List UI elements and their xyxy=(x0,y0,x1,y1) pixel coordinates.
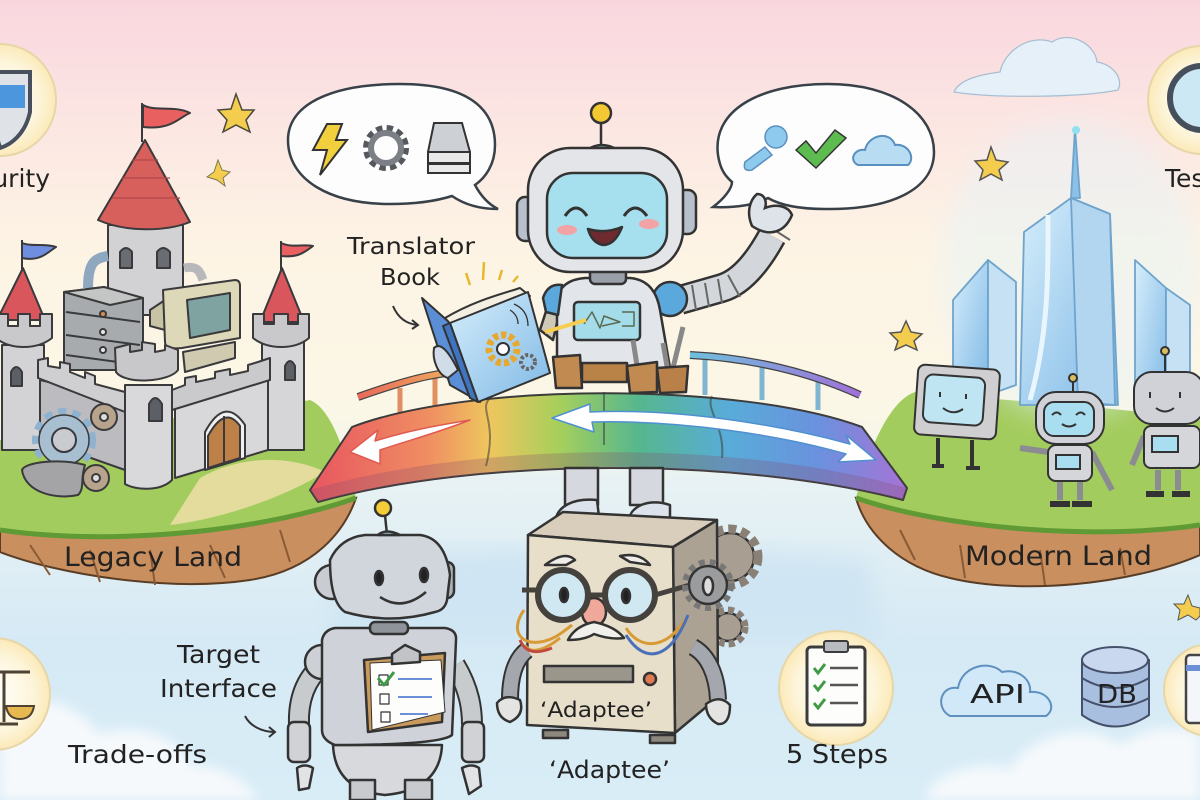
shoulders xyxy=(305,645,339,679)
label: target interface: Target xyxy=(176,640,260,669)
icon: trade-offs scales badge xyxy=(0,638,50,750)
icon: gear xyxy=(367,129,405,167)
arrow: book pointer xyxy=(393,306,418,329)
machine feet xyxy=(543,730,675,743)
label: five steps: 5 Steps xyxy=(786,740,888,770)
character: center robot xyxy=(517,103,790,527)
icon: happy monitor character xyxy=(914,364,1000,468)
panel: modern land island xyxy=(856,392,1200,586)
neck xyxy=(590,268,626,284)
old computer xyxy=(150,280,240,372)
icon: star top left xyxy=(218,94,254,132)
legs xyxy=(565,468,663,505)
icon: document badge xyxy=(1164,644,1200,736)
right pipe xyxy=(184,267,203,280)
icon: glow rays xyxy=(466,262,518,285)
icon: test pill xyxy=(744,126,787,170)
ears xyxy=(315,565,349,599)
icon: small modern robot right xyxy=(1132,347,1200,494)
bridge railings xyxy=(358,355,860,422)
label: modern land: Modern Land xyxy=(965,541,1152,572)
label: target interface xyxy=(160,640,277,703)
label: adaptee on machine: ‘Adaptee’ xyxy=(540,698,652,722)
top face xyxy=(528,512,717,547)
icon: small modern robot center xyxy=(1020,374,1112,504)
mustache xyxy=(568,622,624,640)
ears xyxy=(517,197,535,241)
icon: star right upper xyxy=(975,147,1008,180)
blue pipe xyxy=(88,256,108,288)
front tower xyxy=(125,385,172,489)
side gear xyxy=(689,566,727,604)
water shimmer xyxy=(330,549,880,640)
arms xyxy=(510,650,527,700)
label: api: API xyxy=(970,680,1025,710)
raised robot hand xyxy=(749,194,792,232)
panel: legacy land island xyxy=(0,400,356,585)
label: translator book: Book xyxy=(380,265,441,291)
eyebrows xyxy=(545,555,650,565)
label: translator book: Translator xyxy=(346,234,476,260)
neck xyxy=(370,622,408,634)
label: legacy land: Legacy Land xyxy=(64,542,242,573)
icon: star bottom right xyxy=(1174,595,1200,620)
label: target interface: Interface xyxy=(160,674,277,703)
door xyxy=(205,412,245,470)
glasses xyxy=(538,570,588,620)
panel: rainbow puzzle bridge xyxy=(310,392,907,502)
arrow: bridge right xyxy=(552,404,876,462)
castle wall left xyxy=(40,380,125,470)
cloud: top right xyxy=(954,38,1120,96)
arrow: bridge left xyxy=(350,420,470,464)
icon: glass skyscrapers xyxy=(940,120,1200,420)
lower body xyxy=(333,745,442,795)
head xyxy=(330,535,450,618)
clipboard xyxy=(364,653,445,732)
arms xyxy=(299,665,322,725)
icon: lightning xyxy=(313,124,347,175)
right turret xyxy=(253,241,313,450)
icon: small star left xyxy=(207,160,230,186)
antenna xyxy=(600,120,602,145)
icon: database cylinder xyxy=(1082,647,1149,726)
character: adaptee machine xyxy=(497,512,758,743)
icon: check xyxy=(796,130,846,168)
callout: modern speech bubble xyxy=(713,84,934,209)
icon: disk drive xyxy=(428,123,470,173)
left arm stub xyxy=(540,305,560,340)
icon: five steps checklist badge xyxy=(779,631,893,745)
feet xyxy=(555,500,670,527)
castle wall right xyxy=(175,375,268,478)
front face xyxy=(527,535,675,733)
character: target interface robot xyxy=(288,500,484,800)
left turret xyxy=(0,240,56,450)
icon: cloud xyxy=(853,136,911,165)
tool belt xyxy=(582,363,627,382)
raised arm xyxy=(680,226,790,310)
icon: star right lower xyxy=(890,321,922,350)
side face xyxy=(673,520,718,733)
head xyxy=(528,148,683,272)
body xyxy=(557,278,670,368)
label: translator book xyxy=(346,234,476,291)
server stack xyxy=(64,287,143,370)
arrow: target pointer xyxy=(245,716,275,737)
icon: testing magnifier badge xyxy=(1148,46,1200,154)
gears xyxy=(36,412,92,468)
callout: legacy speech bubble xyxy=(288,84,498,209)
slot xyxy=(544,666,633,682)
icon: legacy castle xyxy=(0,103,313,496)
icon: security shield badge xyxy=(0,44,56,156)
cloud: bottom right xyxy=(925,728,1200,800)
label: adaptee below machine: ‘Adaptee’ xyxy=(549,756,670,784)
label: trade-offs: Trade-offs xyxy=(67,740,207,769)
nose xyxy=(582,598,606,626)
antenna xyxy=(385,515,387,535)
main tower xyxy=(98,103,190,315)
torso xyxy=(322,628,456,745)
icon: translator book xyxy=(422,288,586,402)
wires xyxy=(517,610,572,650)
cloud: bottom left xyxy=(0,701,258,800)
icon: api cloud xyxy=(941,666,1051,716)
label: db: DB xyxy=(1097,680,1137,710)
